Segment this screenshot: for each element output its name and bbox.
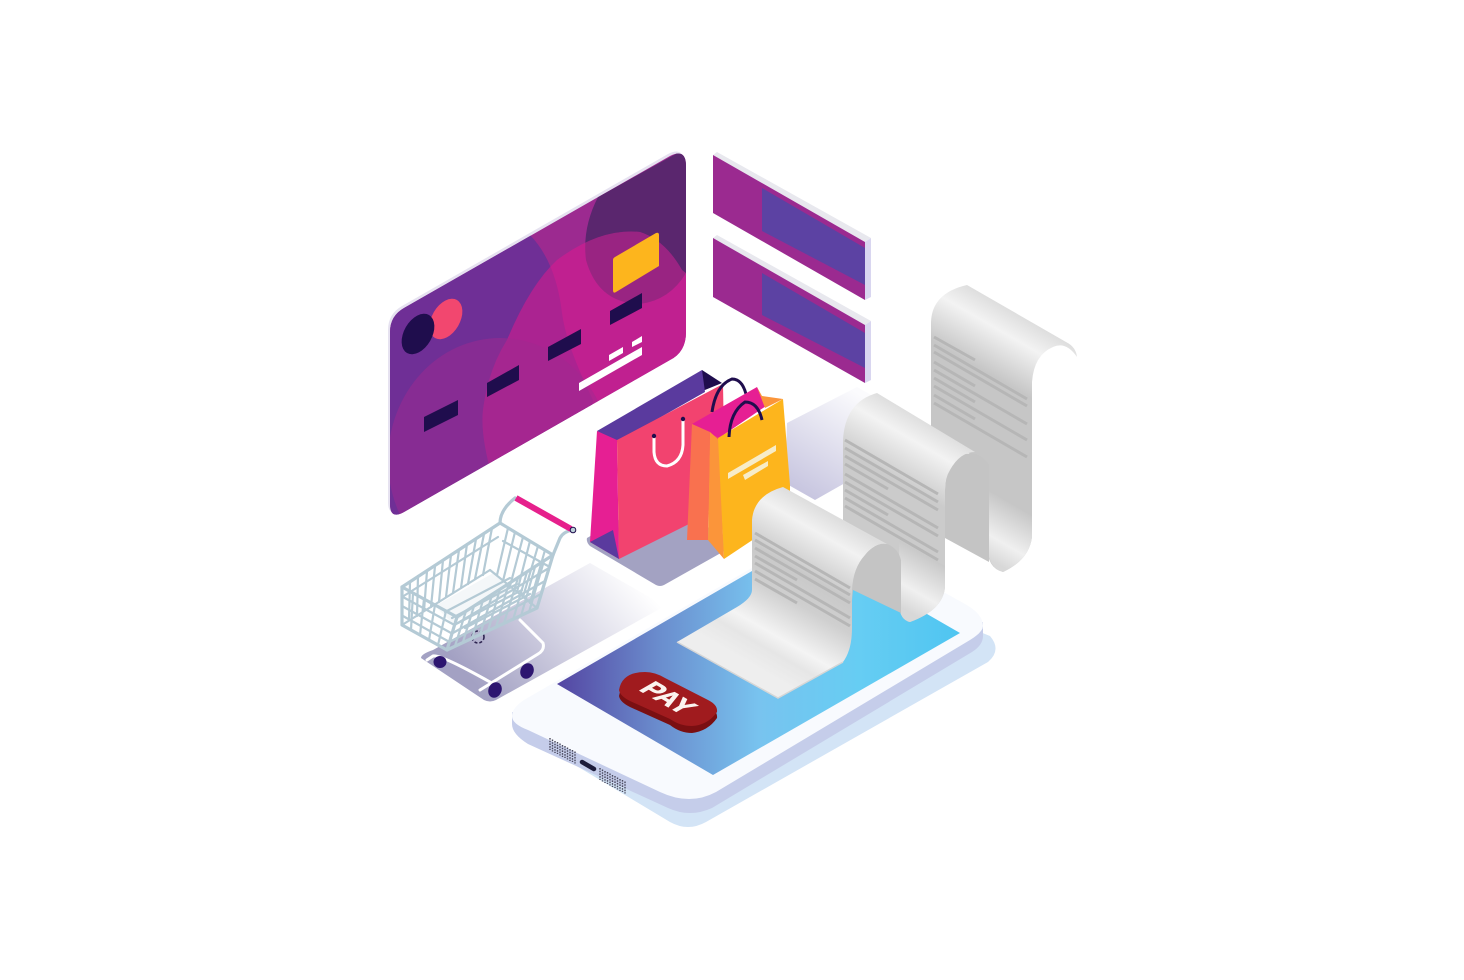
pay button bbox=[619, 672, 717, 733]
phone top surface bbox=[512, 533, 983, 799]
lower fold bbox=[987, 490, 1032, 572]
button side bbox=[619, 678, 717, 733]
bag side bbox=[590, 431, 619, 559]
chassis bbox=[427, 620, 543, 690]
back handle bbox=[712, 379, 746, 412]
fold flap bbox=[757, 387, 783, 408]
phone screen bbox=[557, 542, 960, 775]
bag gusset bbox=[708, 432, 724, 559]
printed lines bbox=[934, 337, 1027, 457]
bag label bars bbox=[728, 445, 776, 480]
bag left side bbox=[687, 424, 710, 540]
receipt middle section bbox=[843, 393, 989, 622]
speaker grille right bbox=[600, 768, 625, 794]
panel one bbox=[713, 152, 871, 300]
phone bbox=[512, 533, 996, 827]
isometric mobile payment illustration bbox=[388, 152, 1077, 827]
card face bbox=[390, 154, 686, 515]
bag front bbox=[718, 399, 790, 559]
card logo bbox=[395, 293, 469, 360]
bag top opening bbox=[597, 370, 705, 442]
inner roll bbox=[852, 544, 901, 613]
shopping bag pink bbox=[590, 370, 725, 559]
printed lines bbox=[755, 533, 850, 626]
receipt back section bbox=[931, 285, 1077, 572]
wheels bbox=[434, 656, 536, 700]
phone shadow bbox=[525, 600, 996, 827]
button top bbox=[619, 672, 717, 726]
floor shadow: bags bbox=[587, 496, 735, 586]
credit card bbox=[388, 152, 686, 515]
tray bbox=[435, 572, 512, 623]
charging port bbox=[582, 762, 594, 769]
button label: PAY bbox=[633, 678, 703, 718]
front handle bbox=[729, 402, 762, 437]
phone side bbox=[512, 622, 983, 813]
card white bars bbox=[579, 336, 642, 391]
card chip bbox=[613, 233, 659, 293]
bag inner dark bbox=[700, 370, 722, 392]
speaker grille left bbox=[550, 738, 575, 764]
shopping bag orange bbox=[687, 379, 790, 559]
swivel bbox=[472, 631, 484, 643]
paper edge bbox=[677, 642, 843, 698]
receipt front section bbox=[677, 487, 901, 698]
floor shadow: cart bbox=[421, 563, 665, 702]
floor shadow: right of bags bbox=[785, 387, 880, 500]
inner roll bbox=[945, 453, 989, 562]
bag interior bbox=[692, 387, 766, 438]
card number blocks bbox=[424, 293, 642, 432]
paper body bbox=[843, 393, 975, 622]
cart handle bbox=[516, 498, 571, 529]
bag handle eyelets bbox=[652, 417, 685, 438]
lower fold bbox=[899, 540, 945, 622]
bag handle white bbox=[654, 420, 683, 466]
basket frame bbox=[402, 498, 572, 650]
shopping cart bbox=[402, 498, 576, 700]
top receipt panels bbox=[713, 152, 871, 383]
panel two bbox=[713, 235, 871, 383]
paper body bbox=[677, 487, 887, 698]
bag front bbox=[617, 384, 725, 559]
printed lines bbox=[845, 440, 938, 560]
handle end cap bbox=[570, 527, 576, 533]
card edge bbox=[388, 152, 684, 513]
paper body bbox=[931, 285, 1077, 572]
wire basket bbox=[402, 528, 549, 646]
bag bottom fold bbox=[590, 530, 619, 559]
